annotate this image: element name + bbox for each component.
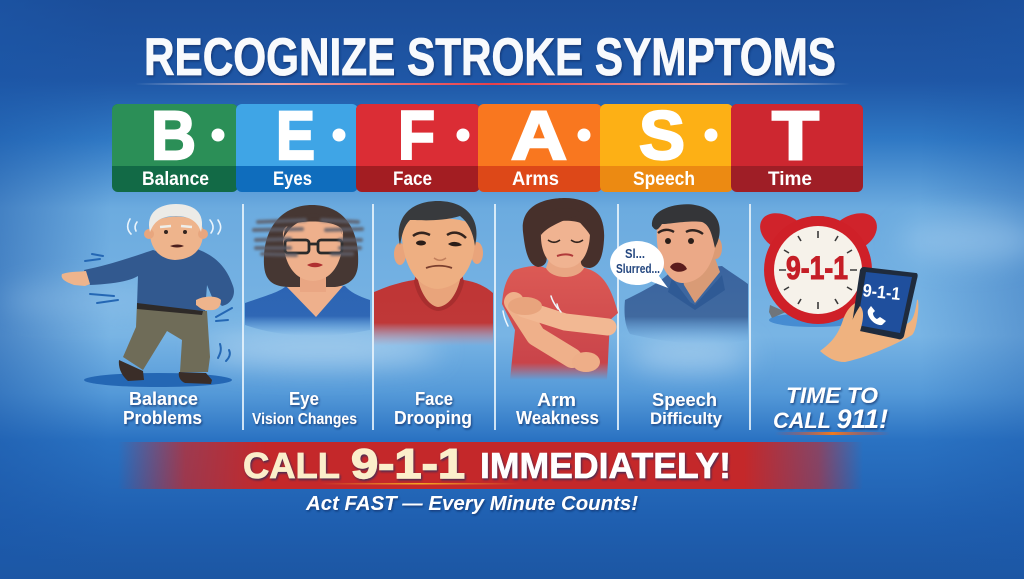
illustration: alarm clock and phone showing 9-1-1 xyxy=(760,213,918,362)
label: face drooping: Drooping xyxy=(394,408,472,428)
label: eye vision changes xyxy=(252,389,357,428)
title: RECOGNIZE STROKE SYMPTOMS xyxy=(144,28,836,87)
BEFAST tile row: Eyes xyxy=(273,169,312,190)
label: time to call 911: CALL 911! xyxy=(773,404,888,434)
BEFAST tile row: T xyxy=(772,97,819,174)
label: face drooping: Face xyxy=(415,389,453,409)
label: speech difficulty xyxy=(650,390,723,428)
label: balance problems: Problems xyxy=(123,408,202,428)
illustration: face drooping, man xyxy=(374,201,493,346)
label: speech difficulty: Difficulty xyxy=(650,409,723,428)
call to action banner xyxy=(118,440,863,489)
label: eye vision changes: Eye xyxy=(289,389,319,409)
BEFAST tile row: Face xyxy=(393,169,432,190)
BEFAST tile row: E xyxy=(276,97,315,174)
speech bubble: Sl... xyxy=(625,246,645,261)
subtitle: act fast: Act FAST — Every Minute Counts! xyxy=(305,493,638,515)
label: face drooping xyxy=(394,389,472,428)
label: balance problems: Balance xyxy=(129,389,198,409)
label: arm weakness xyxy=(516,390,599,428)
label: arm weakness: Arm xyxy=(537,390,576,410)
BEFAST tile row xyxy=(112,97,863,192)
title underline xyxy=(135,83,850,85)
illustration: speech difficulty, man with speech bubble xyxy=(610,204,748,344)
call to action banner: CALL xyxy=(243,445,340,486)
BEFAST tile row: Speech xyxy=(633,169,695,190)
call to action banner: IMMEDIATELY! xyxy=(480,445,731,486)
BEFAST tile row: F xyxy=(398,97,435,174)
orange underline for time to call xyxy=(775,432,890,435)
BEFAST tile row: Time xyxy=(768,169,812,190)
label: speech difficulty: Speech xyxy=(652,390,717,410)
BEFAST tile row: Balance xyxy=(142,169,209,190)
BEFAST tile row: A xyxy=(511,97,567,174)
label: balance problems xyxy=(123,389,202,428)
illustration: arm weakness, woman holding arm xyxy=(502,198,618,380)
illustration: alarm clock and phone showing 9-1-1: 9-1-1 xyxy=(862,280,902,304)
speech bubble xyxy=(610,241,668,288)
BEFAST tile row: B xyxy=(151,97,196,174)
label: eye vision changes: Vision Changes xyxy=(252,411,357,428)
label: time to call 911: TIME TO xyxy=(786,383,878,408)
label: time to call 911 xyxy=(773,383,888,434)
call to action banner: 9-1-1 xyxy=(351,440,465,487)
BEFAST tile row: Arms xyxy=(512,169,559,190)
illustration: alarm clock and phone showing 9-1-1: 9-1-1 xyxy=(786,250,848,286)
label: arm weakness: Weakness xyxy=(516,408,599,428)
BEFAST tile row: S xyxy=(639,97,685,174)
illustration: balance problems, elderly man xyxy=(62,204,234,387)
illustration: eye vision changes, woman with blurred sight xyxy=(245,205,370,336)
speech bubble: Slurred... xyxy=(616,261,660,276)
